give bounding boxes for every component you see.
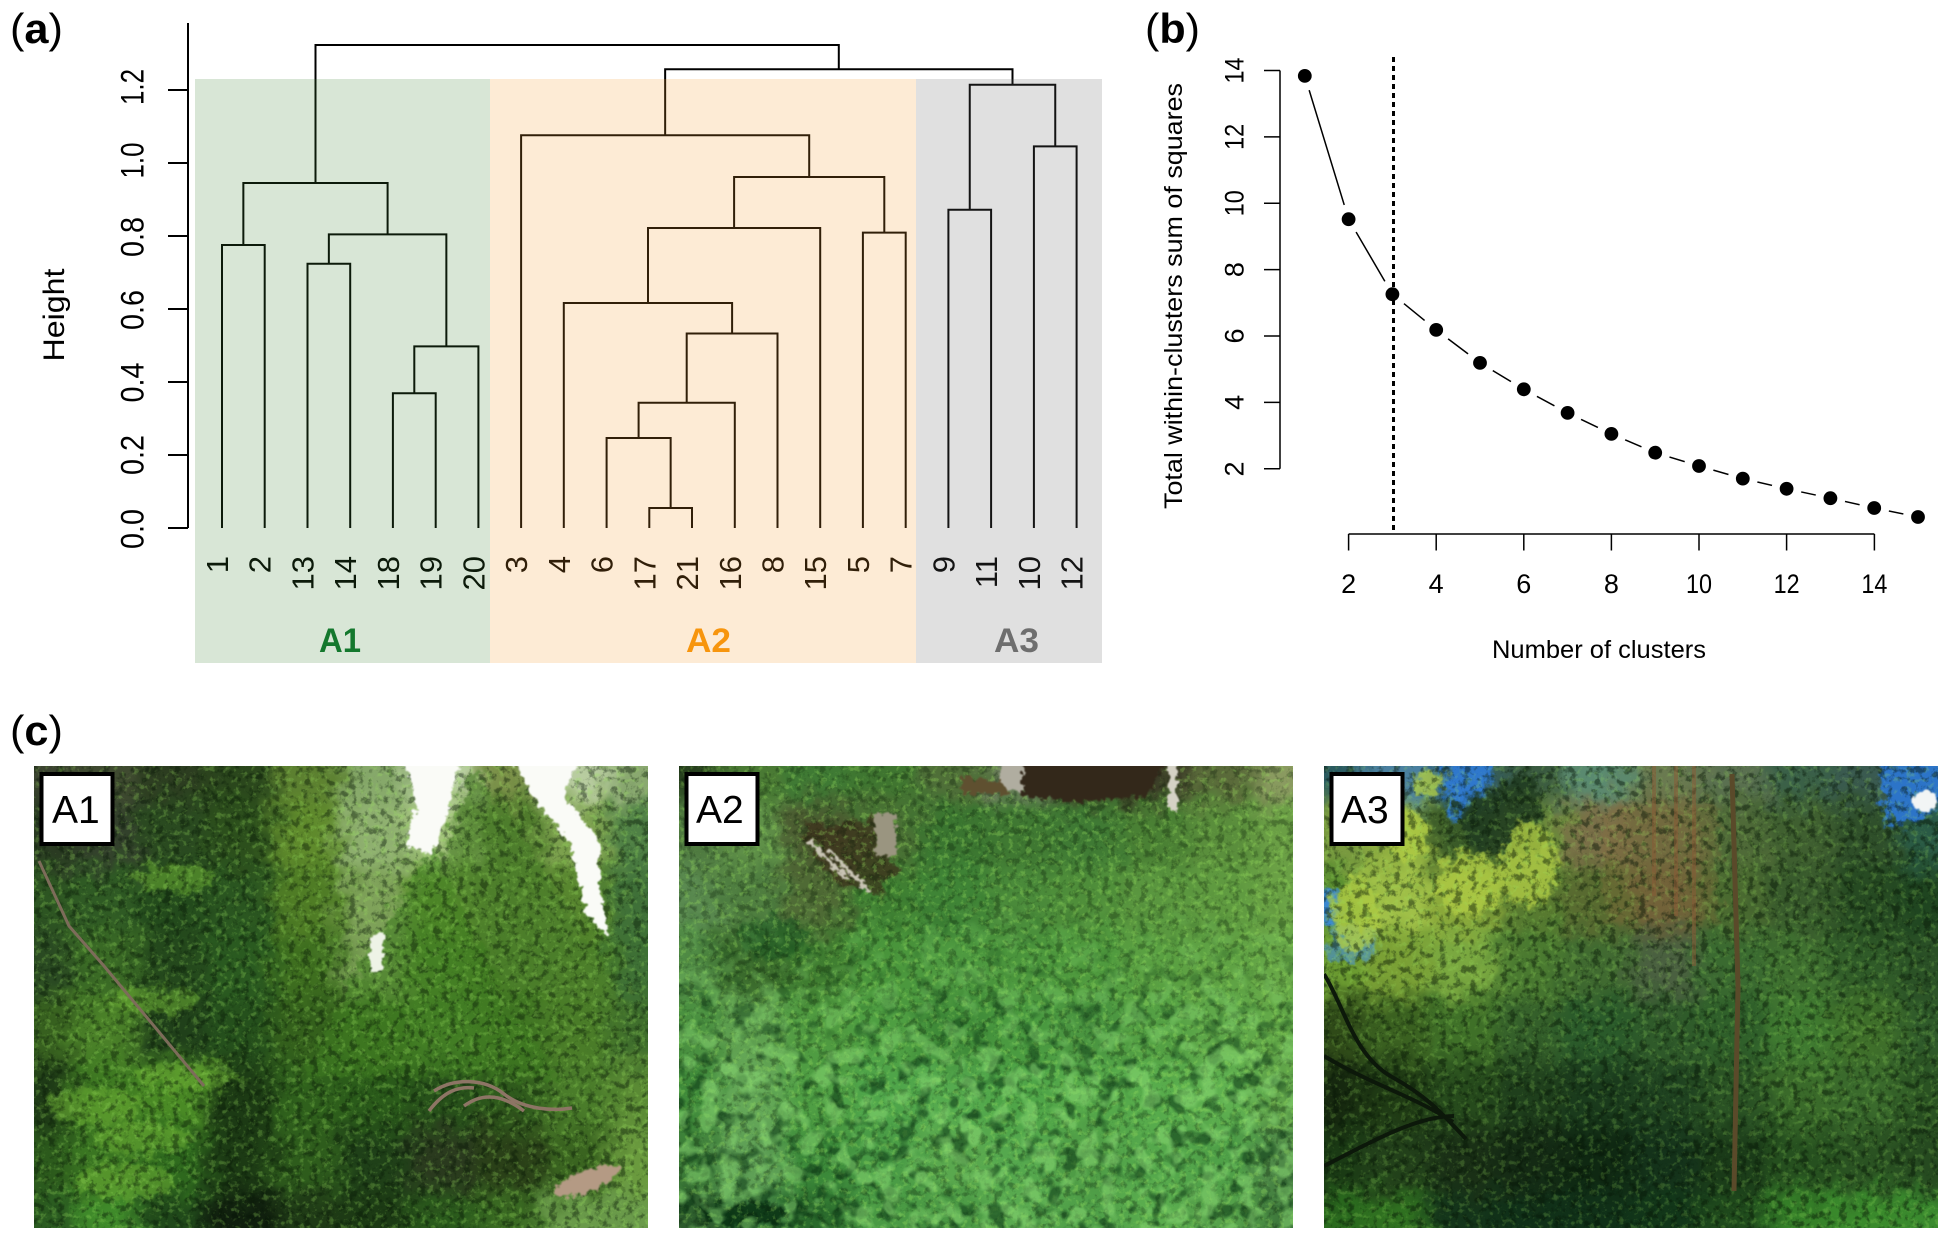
leaf labels: 17	[627, 556, 662, 590]
x axis: 4	[1429, 569, 1444, 599]
leaf labels: 21	[670, 556, 705, 590]
y axis: 4	[1220, 395, 1250, 410]
leaf labels: 6	[585, 556, 620, 573]
leaf labels: 4	[542, 556, 577, 573]
elbow curve	[1290, 61, 1933, 532]
y axis title: Height	[38, 268, 71, 362]
cluster label A1: A1	[319, 622, 361, 660]
cluster band A2	[490, 79, 916, 663]
cluster band A3	[916, 79, 1102, 663]
y axis: 6	[1220, 328, 1250, 344]
leaf labels: 7	[884, 556, 919, 573]
x axis: 12	[1774, 569, 1800, 599]
panel label (a): (a)	[10, 5, 63, 52]
x axis: 14	[1861, 569, 1887, 599]
leaf labels: 20	[456, 556, 491, 590]
leaf labels: 13	[286, 556, 320, 590]
leaf labels: 14	[328, 556, 363, 590]
photo tag A1	[42, 774, 112, 844]
x axis: 10	[1686, 569, 1712, 599]
y axis: height: 0.0	[114, 509, 150, 549]
x axis: 6	[1516, 569, 1531, 599]
leaf labels: 18	[371, 556, 406, 590]
leaf labels: 1	[200, 556, 235, 573]
y axis: height: 0.6	[114, 290, 150, 330]
y axis: height: 0.8	[114, 217, 150, 257]
leaf labels: 9	[926, 556, 961, 573]
y axis: height	[114, 23, 188, 549]
x axis	[1341, 534, 1887, 599]
y axis: 2	[1220, 461, 1250, 477]
panel label (c): (c)	[10, 707, 63, 754]
y axis: height: 0.4	[114, 362, 150, 402]
panel: elbow chart (b)	[1160, 57, 1933, 664]
x axis title: Number of clusters	[1492, 636, 1706, 664]
x axis: 2	[1341, 569, 1356, 599]
y axis: 14	[1220, 58, 1250, 84]
leaf labels: 8	[756, 556, 790, 573]
leaf labels: 15	[798, 556, 833, 590]
photo tag A3	[1332, 774, 1402, 844]
y axis: 12	[1220, 124, 1250, 150]
photo A2: green shrubs	[649, 736, 1323, 1238]
data points	[1298, 69, 1925, 524]
leaf labels	[200, 556, 1090, 590]
leaf labels: 2	[243, 556, 278, 573]
leaf labels: 11	[969, 556, 1004, 588]
y axis: 10	[1220, 190, 1250, 216]
leaf labels: 10	[1012, 556, 1047, 590]
photo A1: spruce forest	[34, 766, 648, 1228]
y axis: height: 1.2	[114, 69, 150, 105]
photo tag A2	[686, 774, 758, 844]
panel: dendrogram (a)	[38, 23, 1102, 663]
cluster band A1	[195, 79, 490, 663]
leaf labels: 5	[841, 556, 876, 573]
leaf labels: 19	[414, 556, 449, 590]
y axis title: Total within-clusters sum of squares	[1160, 83, 1188, 509]
y axis	[1220, 58, 1280, 477]
panel label (b): (b)	[1145, 5, 1200, 52]
y axis: height: 0.2	[114, 435, 150, 475]
cluster label A3: A3	[994, 622, 1039, 660]
optimal cluster marker line	[1392, 57, 1395, 534]
leaf labels: 3	[499, 556, 534, 573]
photo tag A1: A1	[52, 789, 100, 832]
photo tag A3: A3	[1341, 789, 1389, 832]
photo A3: sunlit forest	[1324, 766, 1938, 1228]
y axis: 8	[1220, 262, 1250, 277]
cluster label A2: A2	[686, 622, 731, 660]
photo tag A2: A2	[696, 789, 744, 832]
x axis: 8	[1604, 569, 1619, 599]
dendrogram tree	[222, 45, 1077, 528]
y axis: height: 1.0	[114, 142, 150, 178]
leaf labels: 12	[1055, 556, 1090, 590]
leaf labels: 16	[713, 556, 748, 590]
